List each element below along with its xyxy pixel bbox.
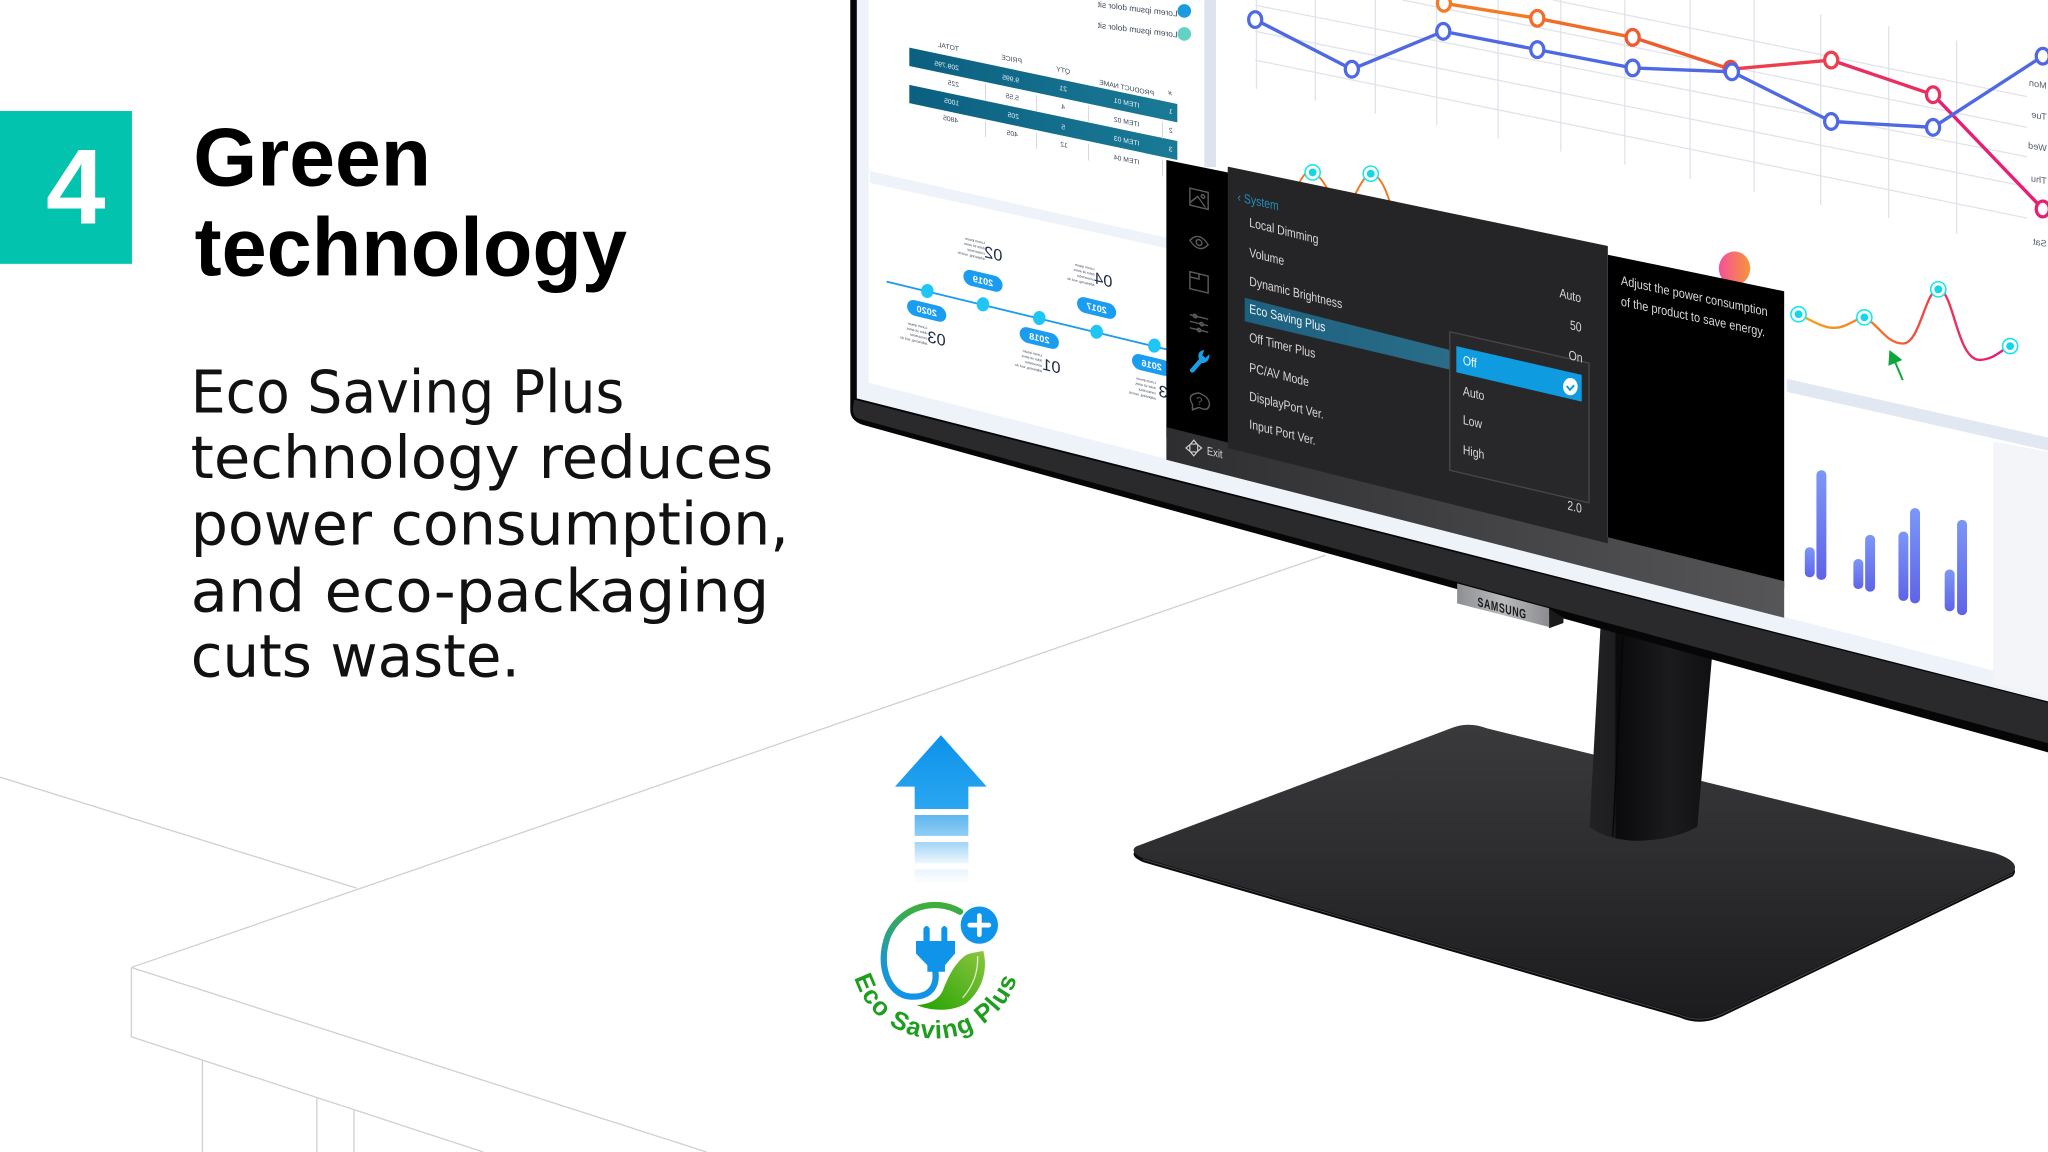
OSD main panel [1228, 167, 1608, 543]
table: 5 [1061, 124, 1065, 132]
logo text: Eco Saving Plus [854, 972, 1016, 1038]
timeline: 02 [984, 242, 1002, 265]
menu labels: 50 [1570, 317, 1582, 335]
dropdown selection [1456, 346, 1582, 402]
body text: and eco-packaging [191, 556, 769, 625]
arrow: upward fading [895, 735, 987, 885]
badge: number 4 [0, 111, 132, 264]
menu labels: Off Timer Plus [1249, 330, 1315, 361]
table: 1005 [944, 98, 959, 108]
table: 5.55 [1005, 93, 1019, 103]
table: ITEM 04 [1114, 154, 1139, 167]
Samsung logo tag: SAMSUNG [1477, 596, 1527, 623]
timeline: consectetur [966, 247, 985, 256]
table: 209.795 [934, 60, 959, 72]
table: TOTAL [937, 42, 959, 53]
icon: window [1190, 272, 1208, 293]
menu labels: Volume [1249, 245, 1284, 269]
timeline: 03 [927, 327, 946, 350]
menu labels: Local Dimming [1249, 215, 1318, 247]
menu labels: Input Port Ver. [1249, 416, 1316, 448]
table: 1 [1169, 108, 1173, 116]
menu labels: ‹ System [1238, 189, 1279, 214]
ring and cord [884, 905, 960, 997]
table: 205 [1007, 112, 1019, 121]
legend [1097, 0, 1191, 41]
sidebar icons [1186, 188, 1209, 456]
blue series [1255, 20, 2043, 127]
OSD footer [1166, 427, 1784, 618]
leaf [917, 951, 985, 1010]
timeline: 2018 [1029, 331, 1049, 346]
timeline: 2016 [1141, 358, 1162, 373]
table: 9.995 [1002, 74, 1019, 85]
timeline: dolor sit amet, [1135, 381, 1156, 390]
timeline: adipiscing, sed do [1129, 390, 1156, 401]
heading: technology [195, 203, 627, 294]
stand neck [1590, 624, 1712, 841]
menu labels: High [1463, 442, 1484, 463]
body text: Eco Saving Plus [191, 358, 624, 427]
table: ITEM 03 [1114, 135, 1139, 148]
body text: cuts waste. [191, 622, 520, 691]
menu labels: DisplayPort Ver. [1249, 388, 1324, 422]
body text: power consumption, [191, 490, 789, 559]
table: QTY [1056, 66, 1070, 76]
timeline: consectetur [909, 332, 927, 341]
day labels: Wed [2028, 140, 2047, 153]
body text [191, 358, 789, 691]
menu labels: of the product to save energy. [1621, 294, 1765, 340]
day labels [2028, 78, 2047, 249]
gray right panel [1993, 441, 2048, 697]
menu labels: Eco Saving Plus [1249, 301, 1325, 335]
icon: eye [1190, 234, 1208, 251]
screen frames [857, 0, 2048, 705]
timeline: 2019 [973, 274, 993, 288]
plus circle [961, 906, 998, 944]
timeline: Lorem ipsum [1023, 349, 1042, 358]
menu labels: Adjust the power consumption [1621, 273, 1768, 319]
timeline: dolor sit amet, [1073, 268, 1095, 277]
menu labels: On [1569, 347, 1583, 366]
icon: Eco Saving Plus logo [854, 902, 1016, 1038]
table: # [1168, 90, 1172, 98]
table: 21 [1059, 85, 1067, 94]
table: 4805 [943, 115, 958, 125]
stand base [1134, 725, 2015, 1022]
menu labels: PC/AV Mode [1249, 360, 1309, 390]
icon: exit pad [1186, 440, 1202, 456]
menu labels: 2.0 [1567, 497, 1582, 516]
menu labels: Dynamic Brightness [1249, 273, 1342, 312]
timeline: 2017 [1086, 301, 1107, 316]
menu labels: Low [1463, 412, 1482, 432]
dropdown outline [1450, 332, 1589, 503]
check mark [1563, 378, 1578, 395]
day labels: Tue [2031, 109, 2047, 122]
table: PRODUCT NAME [1099, 79, 1154, 98]
table: PRICE [1001, 54, 1022, 66]
day labels: Sat [2033, 236, 2047, 249]
table: 405 [1006, 130, 1018, 139]
menu labels [1207, 189, 1768, 516]
table: 4 [1061, 104, 1065, 111]
table [909, 42, 1177, 176]
timeline: dolor sit amet, [906, 326, 927, 335]
timeline: adipiscing, sed do [1015, 363, 1042, 373]
OSD menu [1166, 160, 1784, 618]
leaf highlight [963, 956, 978, 998]
timeline: Lorem ipsum [1136, 376, 1156, 385]
timeline: consectetur [1076, 273, 1095, 282]
menu labels: Off [1463, 352, 1477, 371]
timeline: 03 [1159, 381, 1177, 404]
heading: Green [193, 112, 431, 203]
menu labels: Exit [1207, 445, 1223, 462]
OSD black back panels [1166, 160, 1228, 442]
day labels: Mon [2029, 78, 2047, 91]
timeline: 04 [1094, 268, 1112, 292]
timeline: 2020 [917, 304, 937, 319]
table: 2 [1169, 127, 1173, 135]
timeline: adipiscing, sed do [958, 250, 985, 261]
timeline: adipiscing, sed do [900, 335, 927, 346]
timeline: dolor sit amet, [1021, 354, 1042, 363]
plug [916, 926, 955, 972]
table: ITEM 02 [1114, 116, 1139, 129]
curve chart [1293, 165, 2018, 360]
table: 3 [1169, 146, 1173, 154]
timeline: consectetur [1138, 387, 1156, 395]
icon: sliders [1190, 313, 1208, 334]
orange to pink series [1444, 3, 2043, 209]
grid [1255, 0, 2027, 234]
panel strip right [1787, 379, 2048, 451]
bar chart [1805, 470, 1967, 615]
highlighted row [1245, 298, 1450, 370]
timeline: dolor sit amet, [963, 241, 985, 250]
cursor arrow [1888, 350, 1903, 380]
timeline: Lorem ipsum [965, 237, 985, 245]
icon: wrench [1190, 350, 1209, 373]
timeline: consectetur [1024, 360, 1042, 368]
monitor screen [857, 0, 2048, 705]
table: ITEM 01 [1114, 97, 1139, 110]
monitor bezel [850, 0, 2048, 752]
Samsung logo tag [1457, 583, 1563, 628]
body text: technology reduces [191, 423, 773, 492]
day labels: Thu [2031, 173, 2047, 186]
line chart [1249, 0, 2048, 249]
icon: help bubble [1190, 391, 1209, 414]
table: 12 [1060, 141, 1068, 150]
table: 225 [947, 80, 959, 89]
badge: number 4: 4 [46, 126, 106, 246]
timeline: Lorem ipsum [908, 321, 927, 330]
timeline: 01 [1042, 355, 1061, 378]
menu labels: Auto [1560, 285, 1581, 306]
heading [193, 112, 627, 294]
desk outline [0, 555, 1326, 1152]
timeline: Lorem ipsum [1075, 263, 1095, 271]
icon: help bubble: ? [1196, 395, 1203, 409]
timeline [887, 237, 1177, 404]
legend: Lorem ipsum dolor sit [1097, 20, 1178, 39]
menu labels: Auto [1463, 383, 1485, 404]
timeline: adipiscing, sed do [1067, 277, 1095, 287]
icon: picture [1190, 188, 1208, 209]
